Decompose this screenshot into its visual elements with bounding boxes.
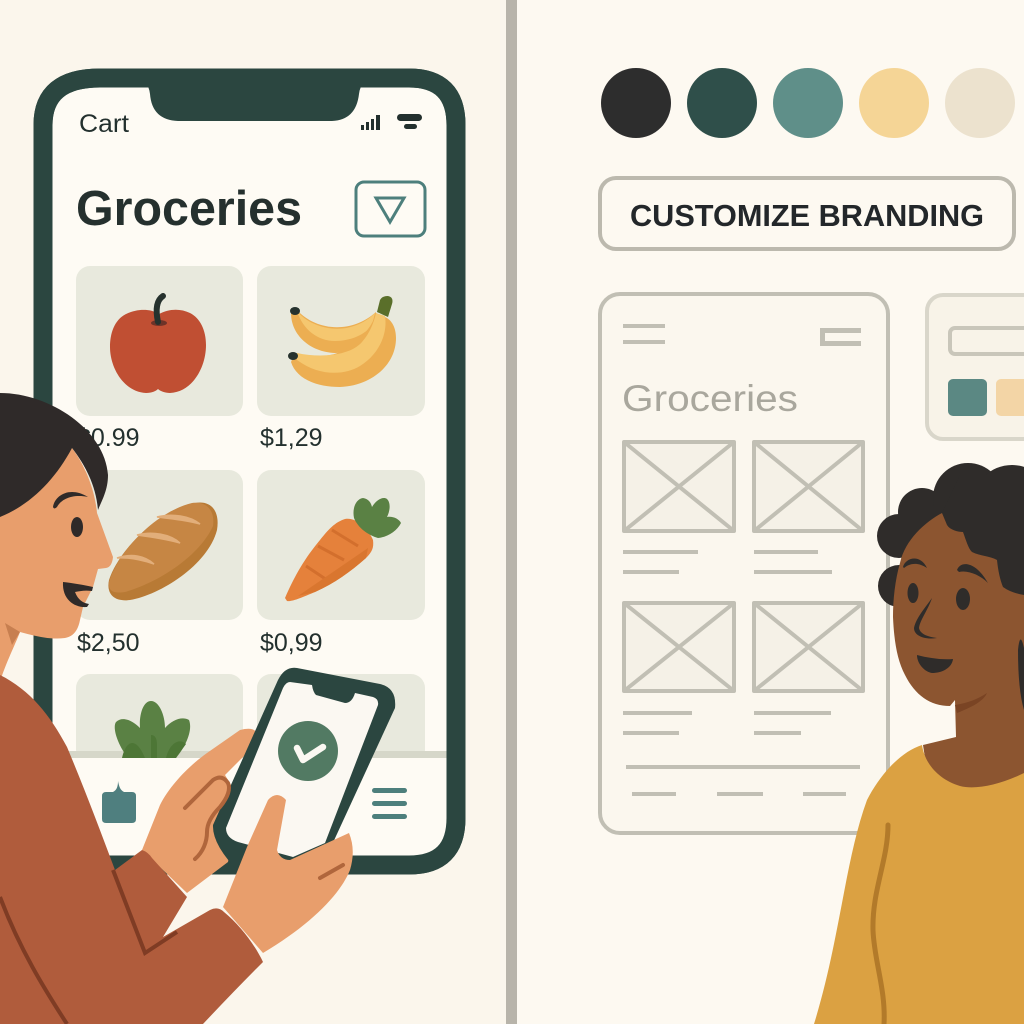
hair front — [942, 475, 1024, 595]
price labels — [77, 424, 323, 657]
phone screen — [226, 682, 378, 857]
panel: style card — [927, 295, 1024, 439]
wireframe heading: Groceries — [622, 378, 798, 419]
notch — [134, 78, 376, 121]
divider — [506, 0, 517, 1024]
bottom nav band — [52, 751, 447, 856]
label: cart: Cart — [79, 110, 129, 138]
mouth — [917, 655, 953, 673]
icon: bread — [108, 503, 218, 600]
icon: filter — [356, 182, 425, 236]
price labels: $0.99 — [77, 424, 140, 452]
palette swatches — [601, 68, 1015, 138]
eyebrow — [53, 492, 88, 508]
sweater — [0, 675, 263, 1024]
neck fold — [5, 623, 20, 645]
icon: carrot — [285, 498, 401, 601]
wireframe header — [623, 324, 861, 346]
back hand — [142, 729, 257, 893]
price labels: $0,99 — [260, 629, 323, 657]
mouth — [63, 582, 93, 607]
sweater — [814, 745, 1024, 1024]
image placeholders — [624, 442, 863, 691]
icon: banana — [288, 296, 396, 387]
icon: apple — [110, 296, 206, 393]
heading: groceries: Groceries — [76, 182, 302, 236]
neck and face — [893, 513, 1024, 790]
eyes and brows — [908, 583, 918, 603]
icon: status — [361, 114, 422, 130]
icon: leafy greens — [115, 701, 190, 758]
person: right — [814, 463, 1024, 1024]
panel: wireframe — [600, 294, 888, 833]
hand line — [185, 778, 229, 859]
face — [0, 440, 113, 682]
placeholder text lines — [623, 550, 860, 796]
hair — [0, 393, 108, 517]
person: left — [0, 393, 395, 1024]
nose — [914, 598, 937, 639]
product tiles — [76, 266, 425, 764]
hair curls — [877, 463, 1024, 607]
icon: chat — [102, 781, 136, 823]
front hand — [223, 795, 353, 953]
panel: phone mockup — [43, 78, 456, 865]
icon: menu — [372, 788, 407, 819]
price labels: $1,29 — [260, 424, 323, 452]
small phone — [213, 668, 395, 873]
button: customize branding: CUSTOMIZE BRANDING — [630, 198, 984, 233]
neck fold — [955, 693, 987, 713]
phone border redraw — [43, 78, 456, 865]
icon: check badge — [278, 721, 338, 781]
button: customize branding — [600, 178, 1014, 249]
price labels: $2,50 — [77, 629, 140, 657]
eye — [71, 517, 83, 537]
